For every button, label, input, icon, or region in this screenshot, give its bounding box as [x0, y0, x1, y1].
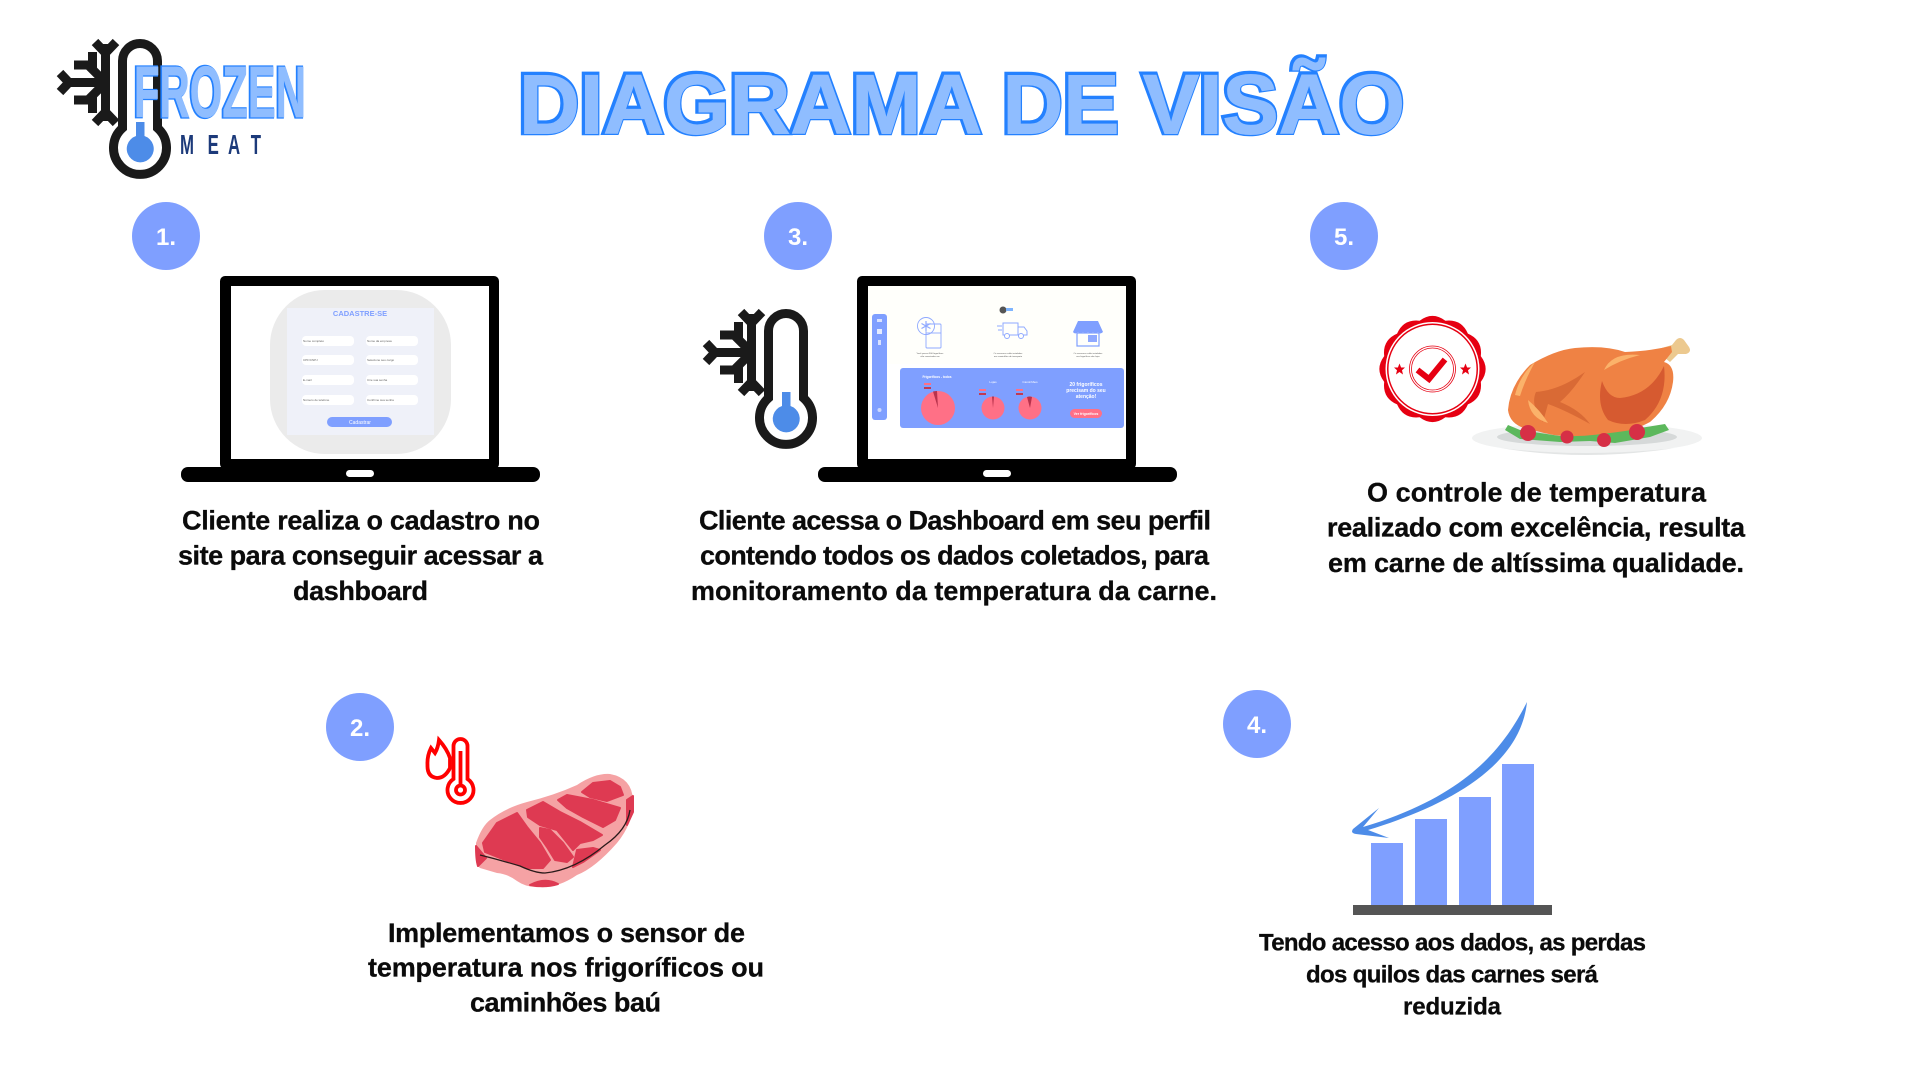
laptop with sign-up form: Nome da empresa — [367, 339, 392, 343]
dashboard chart panel — [900, 368, 1124, 428]
step 4 panel — [1223, 690, 1646, 1020]
laptop with sign-up form: Confirme sua senha — [367, 398, 394, 402]
laptop with sign-up form — [181, 276, 540, 482]
dashboard chart panel: Lojas — [989, 380, 997, 384]
text: step 4: dos quilos das carnes será — [1306, 962, 1599, 988]
dashboard icon: fridge — [918, 318, 941, 348]
title: DIAGRAMA DE VISÃO — [519, 58, 1405, 152]
laptop with sign-up form: Crie sua senha — [367, 378, 388, 382]
step 5 panel — [1310, 202, 1746, 578]
laptop with sign-up form: CPF/CNPJ — [303, 358, 318, 362]
logo wordmark FROZEN: FROZEN — [134, 53, 306, 133]
logo wordmark MEAT: MEAT — [180, 129, 261, 160]
text: step 4: reduzida — [1403, 994, 1502, 1020]
dashboard icon: truck — [997, 323, 1027, 338]
number badge 4 — [1223, 690, 1291, 758]
text: step 1: dashboard — [293, 576, 428, 606]
text: step 3 — [691, 506, 1217, 606]
text: step 2: caminhões baú — [470, 988, 661, 1018]
number badge 5 — [1310, 202, 1378, 270]
dashboard captions: nos caminhões de transporte — [994, 355, 1023, 358]
laptop with sign-up form: Número de telefone — [303, 398, 330, 402]
text: step 2 — [368, 918, 764, 1018]
text: step 5 — [1327, 478, 1746, 578]
number badge 5: 5. — [1334, 224, 1354, 251]
illustration: raw steak — [476, 774, 633, 887]
text: step 5: em carne de altíssima qualidade. — [1328, 548, 1744, 578]
dashboard chart panel: Frigoríficos - todos — [922, 375, 952, 379]
text: step 2: temperatura nos frigoríficos ou — [368, 952, 764, 982]
arrow — [1352, 702, 1527, 838]
baseline — [1353, 905, 1552, 915]
number badge 2: 2. — [350, 715, 370, 742]
bar chart with descending arrow — [1352, 702, 1552, 915]
dashboard captions: Os sensores estão instalados — [994, 352, 1023, 355]
text: step 1: site para conseguir acessar a — [178, 540, 544, 570]
text: step 5: O controle de temperatura — [1367, 478, 1707, 508]
laptop with sign-up form: CADASTRE-SE — [333, 309, 387, 318]
laptop with sign-up form: E-mail — [303, 378, 312, 382]
laptop with sign-up form: Nome completo — [303, 339, 324, 343]
number badge 1 — [132, 202, 200, 270]
number badge 2 — [326, 693, 394, 761]
logo wordmark FROZEN — [133, 53, 306, 133]
dashboard icon: store — [1073, 321, 1103, 346]
number badge 3: 3. — [788, 224, 808, 251]
number badge 1: 1. — [156, 224, 176, 251]
illustration: roast turkey on plate — [1472, 338, 1702, 455]
number badge 4: 4. — [1247, 712, 1267, 739]
icon: snowflake thermometer logo — [60, 42, 166, 174]
dashboard captions: Você possui 300 frigoríficos — [917, 352, 944, 355]
dashboard chart panel: Ver frigoríficos — [1074, 412, 1098, 416]
laptop with sign-up form: Cadastrar — [349, 420, 371, 426]
text: step 3: Cliente acessa o Dashboard em seu perfil — [699, 506, 1211, 536]
step 3 panel — [691, 202, 1217, 606]
text: step 2: Implementamos o sensor de — [388, 918, 745, 948]
dashboard logo — [1000, 306, 1013, 314]
dashboard captions: Os sensores estão instalados — [1074, 352, 1103, 355]
logo wordmark FROZEN: FROZEN — [133, 53, 305, 133]
dashboard chart panel: 20 frigoríficos — [1069, 382, 1103, 388]
text: step 3: monitoramento da temperatura da carne. — [691, 576, 1217, 606]
text: step 4 — [1259, 930, 1646, 1020]
laptop with dashboard — [818, 276, 1177, 482]
dashboard chart panel: Caminhões — [1022, 380, 1038, 384]
dashboard captions: não conectados em — [920, 355, 940, 358]
number badge 3 — [764, 202, 832, 270]
dashboard captions: nos frigoríficos das lojas — [1076, 355, 1101, 358]
laptop with sign-up form: Selecione seu cargo — [367, 358, 395, 362]
text: step 1: Cliente realiza o cadastro no — [182, 506, 540, 536]
text: step 5: realizado com excelência, resulta — [1327, 512, 1746, 542]
dashboard sidebar — [872, 314, 887, 420]
bars — [1371, 764, 1534, 905]
step 2 panel — [326, 693, 764, 1018]
title: DIAGRAMA DE VISÃO — [518, 56, 1404, 150]
dashboard chart panel: precisam do seu — [1066, 388, 1106, 394]
icon: snowflake thermometer — [706, 312, 812, 444]
text: step 1 — [178, 506, 544, 606]
text: step 3: contendo todos os dados coletados, para — [700, 540, 1210, 570]
logo: Frozen Meat — [60, 42, 306, 174]
step 1 panel — [132, 202, 544, 606]
dashboard captions — [917, 352, 1103, 358]
icon: hot thermometer — [427, 739, 474, 803]
dashboard chart panel: atenção! — [1076, 394, 1097, 400]
text: step 4: Tendo acesso aos dados, as perdas — [1259, 930, 1646, 956]
icon: quality seal — [1379, 316, 1486, 422]
